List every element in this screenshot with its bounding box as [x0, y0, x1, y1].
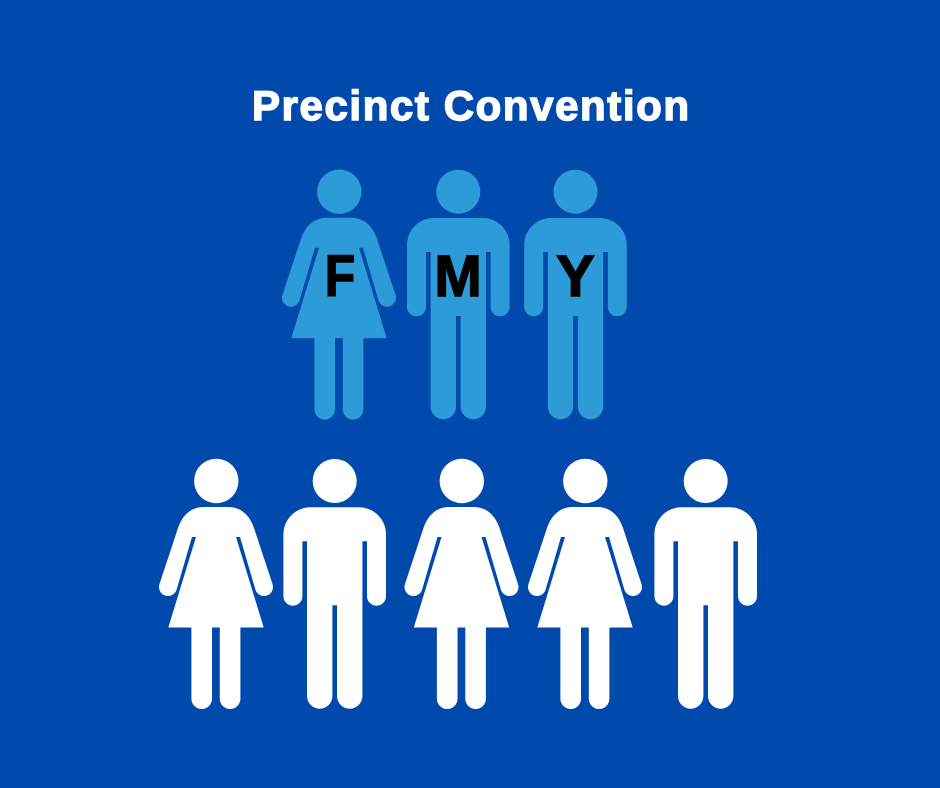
figure: woman labelled F	[282, 170, 396, 420]
figure: woman 3	[528, 459, 642, 709]
figure: man 1	[283, 459, 386, 709]
letter labels	[325, 244, 595, 309]
figure: man labelled Y	[524, 170, 627, 419]
top row: light blue figures	[282, 170, 627, 420]
letter Y: Y	[556, 244, 595, 309]
title: Precinct Convention	[252, 82, 689, 129]
figure: woman 2	[404, 459, 519, 709]
figure: woman 1	[159, 459, 273, 709]
letter F: F	[325, 245, 355, 309]
letter M: M	[434, 244, 482, 309]
bottom row: white figures	[159, 459, 757, 709]
figure: man labelled M	[407, 170, 510, 419]
figure: man 2	[654, 459, 757, 709]
